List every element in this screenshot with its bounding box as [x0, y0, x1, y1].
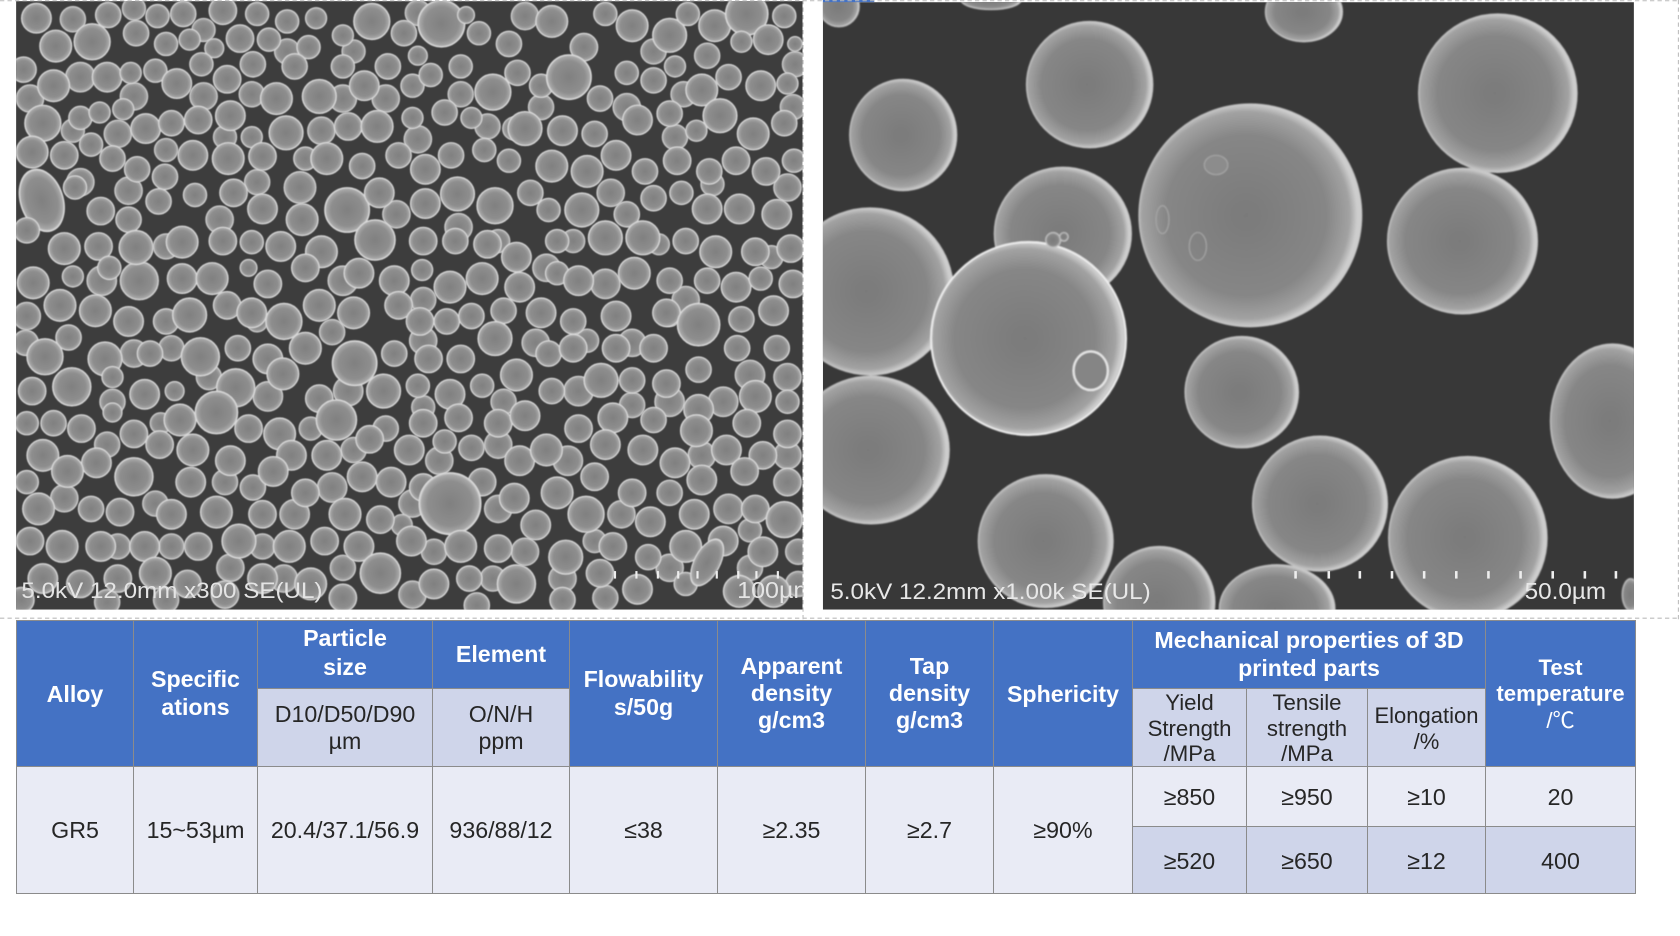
cell: elongation 20C [1367, 766, 1486, 827]
cell: sphericity value [993, 766, 1133, 894]
header: Flowability: Flowability s/50g [584, 666, 703, 720]
cell: temperature 20 [1485, 766, 1636, 827]
subheader: Tensile strength: Tensile strength /MPa [1267, 690, 1347, 766]
header: Mechanical properties [1132, 620, 1486, 689]
header: Sphericity [993, 620, 1133, 767]
cell: tap density value: ≥2.7 [907, 816, 952, 842]
cell: elongation 20C: ≥10 [1407, 784, 1446, 810]
header: Sphericity: Sphericity [1007, 680, 1119, 706]
cell: GR5 [16, 766, 134, 894]
header: Test temperature: Test temperature /℃ [1496, 655, 1625, 733]
cell: temperature 400: 400 [1541, 848, 1580, 874]
cell: tensile 20C [1246, 766, 1368, 827]
cell: flowability value: ≤38 [624, 816, 663, 842]
header: Element: Element [456, 640, 546, 666]
header: Test temperature [1485, 620, 1636, 767]
header: Apparent density [717, 620, 866, 767]
subheader: Tensile strength [1246, 688, 1368, 767]
header: Alloy: Alloy [47, 680, 103, 706]
cell: temperature 400 [1485, 826, 1636, 894]
cell: yield 20C: ≥850 [1164, 784, 1215, 810]
header: Alloy [16, 620, 134, 767]
header: Tap density [865, 620, 994, 767]
cell: yield 400C [1132, 826, 1247, 894]
scale ticks [614, 571, 779, 579]
header: Particle size [257, 620, 433, 689]
cell: tensile 400C [1246, 826, 1368, 894]
micrographs [0, 0, 1679, 620]
subheader: Elongation [1367, 688, 1486, 767]
table: powder properties [16, 620, 1636, 894]
cell: tensile 400C: ≥650 [1281, 848, 1333, 874]
header: Specifications: Specific ations [151, 666, 240, 720]
cell: temperature 20: 20 [1548, 784, 1573, 810]
powder particles, low magnification [9, 0, 807, 618]
cell: element values: 936/88/12 [449, 816, 553, 842]
left micrograph: x300 powder [9, 0, 814, 618]
cell: tap density value [865, 766, 994, 894]
subheader: Elongation: Elongation /% [1374, 703, 1478, 754]
subheader: Yield Strength: Yield Strength /MPa [1148, 690, 1231, 766]
subheader: O/N/H: O/N/H ppm [469, 700, 533, 754]
header: Mechanical properties: Mechanical properties of 3D printed parts [1154, 627, 1464, 680]
cell: apparent density value [717, 766, 866, 894]
right micrograph: x1.00k powder [822, 2, 1634, 610]
cell: elongation 400C [1367, 826, 1486, 894]
background layer of powder particles [13, 0, 811, 615]
header: Element [432, 620, 570, 689]
cell: 15~53µm: 15~53µm [147, 816, 244, 842]
cell: sphericity value: ≥90% [1033, 816, 1093, 842]
header: Tap density: Tap density g/cm3 [889, 653, 970, 733]
SEM caption right: 5.0kV 12.2mm x1.00k SE(UL) [830, 579, 1151, 604]
cell: apparent density value: ≥2.35 [763, 816, 820, 842]
scale ticks [1294, 571, 1617, 579]
cell: flowability value [569, 766, 718, 894]
cell: yield 400C: ≥520 [1164, 848, 1215, 874]
cell: tensile 20C: ≥950 [1281, 784, 1333, 810]
SEM scale label right: 50.0µm [1525, 578, 1606, 604]
subheader: D10/D50/D90: D10/D50/D90 µm [275, 700, 415, 754]
cell: 15~53µm [133, 766, 258, 894]
SEM caption left: 5.0kV 12.0mm x300 SE(UL) [21, 578, 322, 603]
subheader: D10/D50/D90 [257, 688, 433, 767]
subheader: O/N/H [432, 688, 570, 767]
header: Flowability [569, 620, 718, 767]
header: Specifications [133, 620, 258, 767]
large particles [822, 2, 1634, 610]
SEM scale label left: 100µm [737, 577, 814, 603]
cell: element values [432, 766, 570, 894]
cell: GR5: GR5 [51, 816, 99, 842]
cell: particle size values [257, 766, 433, 894]
header: Apparent density: Apparent density g/cm3 [741, 653, 842, 733]
cell: yield 20C [1132, 766, 1247, 827]
cell: elongation 400C: ≥12 [1407, 848, 1446, 874]
header: Particle size: Particle size [303, 625, 387, 680]
cell: particle size values: 20.4/37.1/56.9 [271, 816, 419, 842]
